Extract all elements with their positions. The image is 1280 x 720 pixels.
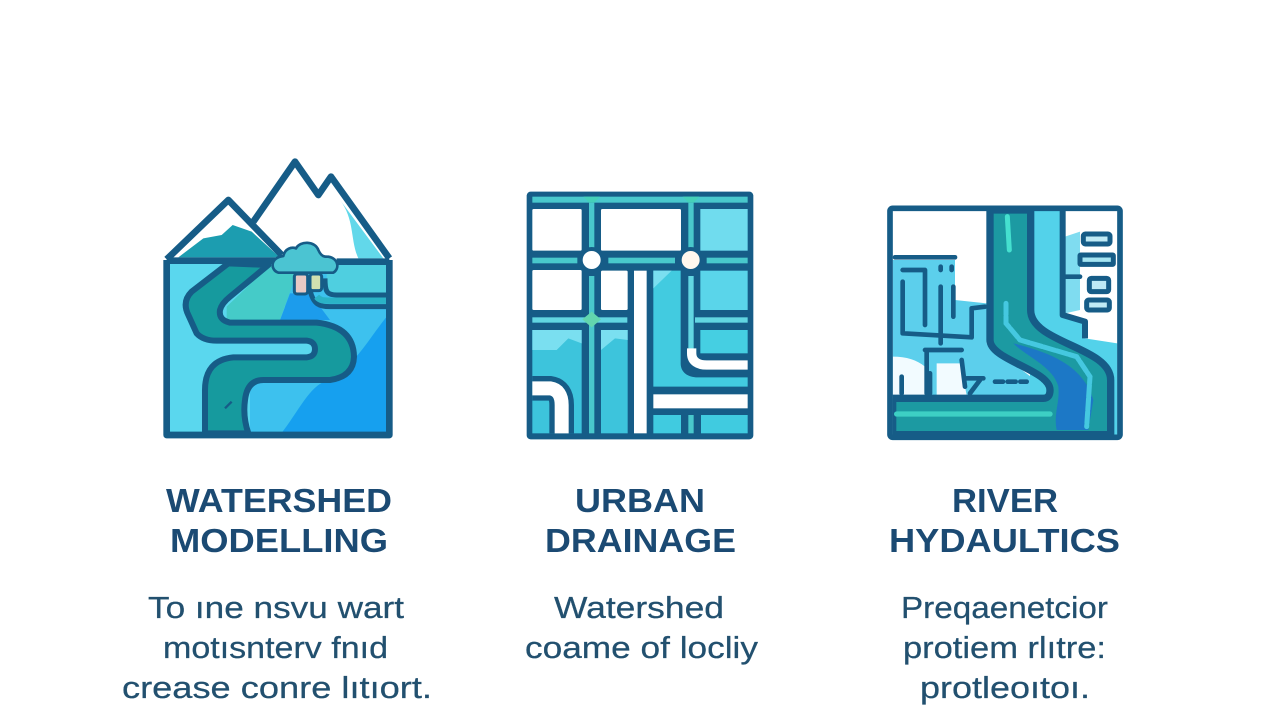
cloud <box>273 243 337 273</box>
green junctions <box>582 197 699 327</box>
description: urban drainage: Watershed <box>554 590 724 625</box>
icon: mountains and river watershed <box>167 162 389 435</box>
heading: watershed modelling: WATERSHED <box>166 482 392 519</box>
basin frame <box>167 260 389 435</box>
heading: river hydraulics: RIVER <box>952 482 1058 519</box>
description: river hydraulics: protleoıtoı. <box>920 670 1090 705</box>
river highlights <box>897 217 1090 427</box>
right tint <box>1065 232 1080 313</box>
description: urban drainage: coame of locliy <box>525 630 759 665</box>
floodplain right <box>1030 211 1117 435</box>
left manhole <box>581 249 603 271</box>
grid base <box>527 192 753 439</box>
heading: urban drainage: DRAINAGE <box>545 522 736 559</box>
icon: street drainage grid <box>527 192 753 439</box>
small mountain <box>167 200 282 259</box>
deep river water <box>1013 343 1093 430</box>
description: river hydraulics: protiem rlıtre: <box>903 630 1106 665</box>
icon: river channel plan <box>890 208 1120 437</box>
bank edge <box>1063 211 1085 338</box>
panel: river hydraulics <box>889 208 1120 705</box>
river highlight <box>225 402 232 408</box>
description: river hydraulics <box>901 590 1108 705</box>
big mountain <box>253 162 389 258</box>
description: river hydraulics: Preqaenetcior <box>901 590 1108 625</box>
heading: watershed modelling: MODELLING <box>170 522 388 559</box>
white L-shaped drain <box>692 348 748 365</box>
city drains <box>895 257 1080 393</box>
heading: urban drainage: URBAN <box>575 482 705 519</box>
gauge symbols <box>1080 234 1113 310</box>
panel: urban drainage <box>525 192 759 665</box>
side stream <box>310 278 387 307</box>
basin background <box>167 262 389 435</box>
cyan blocks <box>532 209 748 433</box>
heading: river hydraulics <box>889 482 1120 559</box>
panel: watershed modelling <box>122 162 432 705</box>
heading: river hydraulics: HYDAULTICS <box>889 522 1120 559</box>
right manhole <box>680 249 702 271</box>
heading: urban drainage <box>545 482 736 559</box>
white blocks <box>532 209 748 433</box>
map frame <box>890 208 1120 437</box>
description: watershed modelling <box>122 590 432 705</box>
map background <box>890 208 1120 437</box>
description: watershed modelling: motısnterv fnıd <box>163 630 388 665</box>
description: watershed modelling: crease conre lıtıort. <box>122 670 432 705</box>
heading: watershed modelling <box>166 482 392 559</box>
drainage channels <box>532 197 748 433</box>
white corner pipe <box>532 388 562 433</box>
description: urban drainage <box>525 590 759 665</box>
river <box>186 263 354 433</box>
description: watershed modelling: To ıne nsvu wart <box>148 590 404 625</box>
floodplain left <box>892 260 1030 395</box>
white building block <box>893 357 967 395</box>
rain gauges <box>294 274 322 294</box>
river channel <box>893 210 1111 435</box>
infographic canvas <box>123 158 1123 705</box>
